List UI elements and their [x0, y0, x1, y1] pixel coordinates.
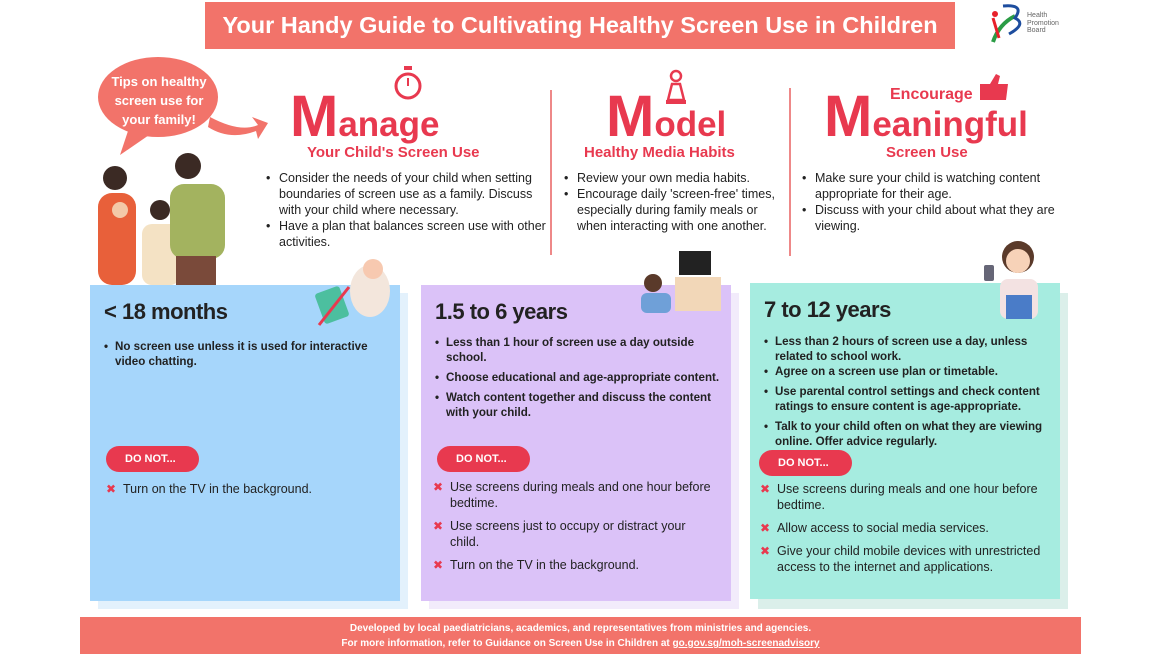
- panel: 7 to 12 years: 7 to 12 years: [764, 297, 891, 322]
- panel: 7 to 12 years: Allow access to social media services.: [777, 521, 989, 535]
- panel: 7 to 12 years: Give your child mobile devices with unrestricted access to the internet and applications.: [777, 544, 1040, 574]
- column: model: [564, 70, 775, 233]
- panel: 7 to 12 years: [750, 283, 1060, 599]
- panel: 1.5 to 6 years: Turn on the TV in the background.: [450, 558, 639, 572]
- panel: under 18 months: No screen use unless it is used for interactive video chatting.: [115, 340, 368, 368]
- panel: under 18 months: Turn on the TV in the background.: [123, 482, 312, 496]
- column: meaningful: [802, 74, 1055, 233]
- panel: 7 to 12 years: Use screens during meals and one hour before bedtime.: [777, 482, 1038, 512]
- panel: 1.5 to 6 years: Use screens during meals and one hour before bedtime.: [450, 480, 711, 510]
- footer: Developed by local paediatricians, academics, and representatives from ministries and agencies.: [350, 623, 811, 634]
- speech bubble: Tips on healthy screen use for your family!: [111, 74, 207, 127]
- title: [205, 2, 955, 49]
- icon: thumb: [980, 74, 1008, 100]
- icon: girl with phone: [984, 241, 1038, 319]
- illustration: family: [98, 153, 225, 285]
- panel: 7 to 12 years: Talk to your child often on what they are viewing online. Offer advice regularly.: [775, 420, 1042, 448]
- logo: Health Promotion Board: [991, 4, 1059, 43]
- heading: Model: Model: [606, 84, 726, 149]
- column: meaningful: Discuss with your child about what they are viewing.: [815, 203, 1055, 233]
- panel: 1.5 to 6 years: Choose educational and age-appropriate content.: [446, 371, 719, 384]
- speech bubble: [98, 57, 268, 155]
- panel: 1.5 to 6 years: [421, 285, 731, 601]
- column: manage: Have a plan that balances screen use with other activities.: [279, 219, 546, 249]
- title: Your Handy Guide to Cultivating Healthy Screen Use in Children: [222, 12, 938, 38]
- heading: Manage: Manage: [290, 84, 439, 149]
- column: manage: Consider the needs of your child when setting boundaries of screen use as a family. Discuss with your child where necessary.: [279, 171, 532, 217]
- column: meaningful: Screen Use: [886, 144, 968, 161]
- panel: 1.5 to 6 years: 1.5 to 6 years: [435, 299, 567, 324]
- column: manage: Your Child's Screen Use: [307, 144, 480, 161]
- icon: child with tv: [641, 251, 721, 313]
- panel: 1.5 to 6 years: Less than 1 hour of screen use a day outside school.: [446, 336, 694, 364]
- logo: Health Promotion Board: Board: [1027, 27, 1046, 34]
- panel: 7 to 12 years: Use parental control settings and check content ratings to ensure content is age-appropriate.: [775, 385, 1040, 413]
- panel: 1.5 to 6 years: DO NOT...: [456, 453, 507, 465]
- panel: 1.5 to 6 years: Use screens just to occupy or distract your child.: [450, 519, 686, 549]
- column: manage: [266, 66, 546, 249]
- column: meaningful: Encourage: [890, 86, 973, 103]
- panel: under 18 months: < 18 months: [104, 299, 227, 324]
- icon: baby with crossed tablet: [315, 259, 390, 326]
- heading: Meaningful: Meaningful: [824, 84, 1028, 149]
- icon: figure: [666, 70, 686, 104]
- footer: [80, 617, 1081, 654]
- panel: 7 to 12 years: Agree on a screen use plan or timetable.: [775, 365, 998, 378]
- panel: 7 to 12 years: DO NOT...: [778, 457, 829, 469]
- column: model: Encourage daily 'screen-free' times, especially during family meals or when interacting with one another.: [577, 187, 775, 233]
- panel: 7 to 12 years: Less than 2 hours of screen use a day, unless related to school work.: [775, 335, 1027, 363]
- footer: For more information, refer to Guidance on Screen Use in Children at go.gov.sg/moh-screenadvisory: [341, 638, 820, 649]
- logo: Health Promotion Board: Health: [1027, 12, 1047, 19]
- column: meaningful: Make sure your child is watching content appropriate for their age.: [815, 171, 1040, 201]
- panel: under 18 months: [90, 285, 400, 601]
- icon: stopwatch: [394, 66, 422, 100]
- column: model: Healthy Media Habits: [584, 144, 735, 161]
- logo: Health Promotion Board: Promotion: [1027, 20, 1059, 26]
- panel: 1.5 to 6 years: Watch content together and discuss the content with your child.: [446, 391, 711, 419]
- panel: under 18 months: DO NOT...: [125, 453, 176, 465]
- column: model: Review your own media habits.: [577, 171, 750, 185]
